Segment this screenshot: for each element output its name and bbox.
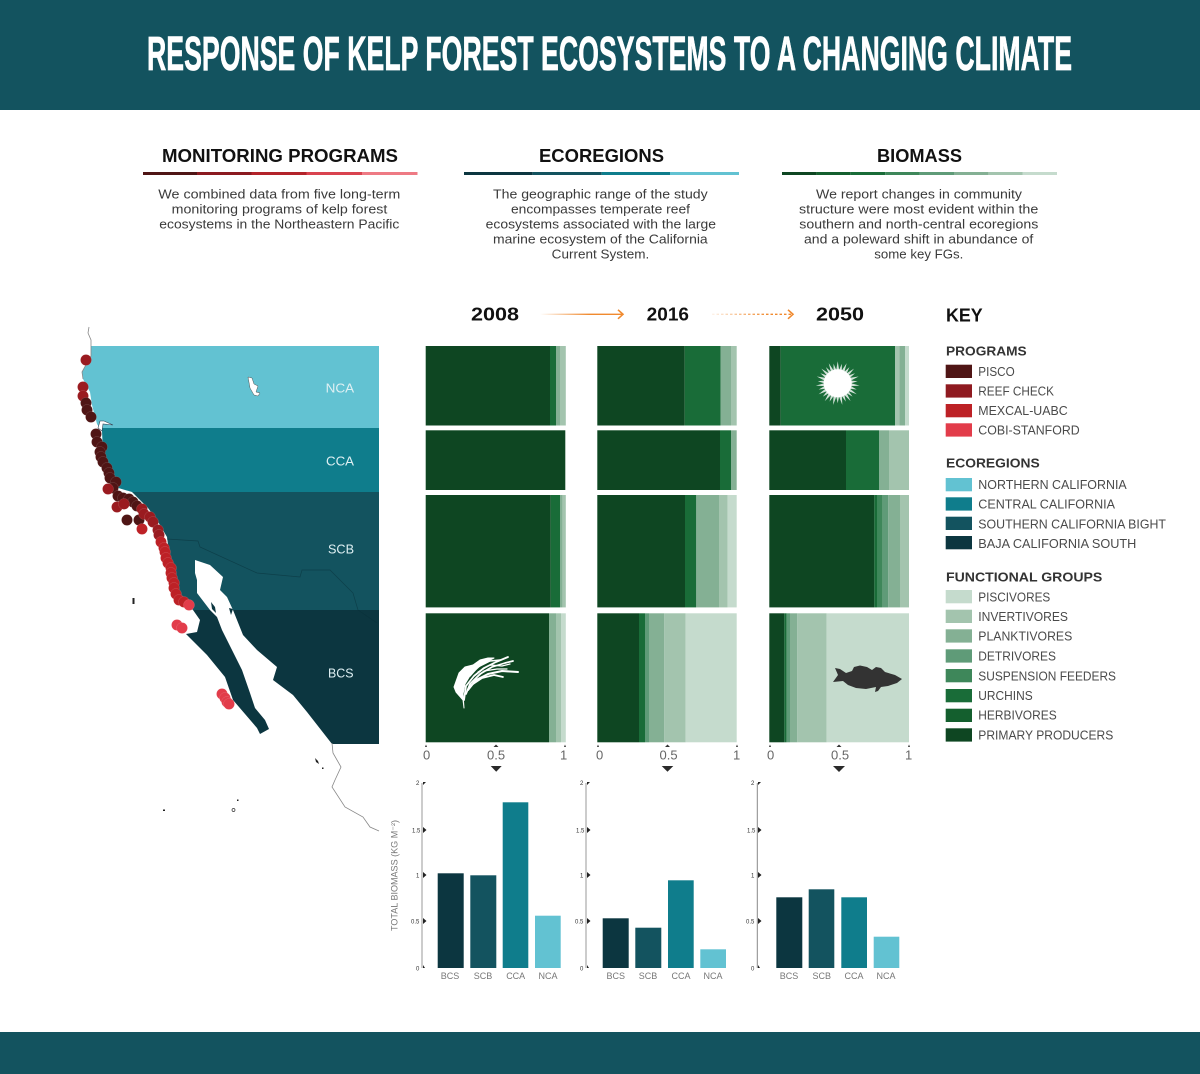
- coastline north: [82, 327, 91, 379]
- y axis: 1: [416, 874, 420, 880]
- legend: ecoregions: BAJA CALIFORNIA SOUTH: [978, 537, 1136, 551]
- bar SCB: [470, 875, 496, 968]
- text block: biomass description: and a poleward shift in abundance of: [804, 232, 1034, 246]
- legend: functional groups: HERBIVORES: [978, 709, 1057, 723]
- bar chart: biomass 2050: [746, 781, 899, 981]
- legend: programs: MEXCAL-UABC: [978, 404, 1068, 418]
- row BCS 2050: [769, 613, 909, 742]
- footer band: [0, 1032, 1200, 1074]
- text block: programs description: We combined data from five long-term: [158, 186, 400, 202]
- panel: biomass intro: [782, 146, 1057, 262]
- text block: ecoregions description: The geographic range of the study: [493, 186, 708, 202]
- legend: functional groups: URCHINS: [978, 689, 1033, 703]
- row SCB 2008: [426, 495, 566, 607]
- bar chart: biomass 2016: [575, 781, 726, 981]
- bar labels: CCA: [506, 971, 525, 981]
- map band: NCA: [60, 346, 379, 428]
- axis: stacked 2050: 1: [905, 747, 912, 762]
- text block: ecoregions description: marine ecosystem of the California: [493, 232, 709, 246]
- text block: ecoregions description: Current System.: [552, 246, 649, 262]
- y axis: [575, 781, 590, 972]
- year heading 2016: 2016: [647, 303, 689, 324]
- map label: BCS: BCS: [328, 666, 354, 681]
- legend: ecoregions: NORTHERN CALIFORNIA: [978, 478, 1127, 492]
- y axis: [746, 781, 762, 972]
- colour rule: programs: [143, 172, 418, 175]
- map band: SCB: [132, 492, 379, 610]
- y axis: 1.5: [412, 828, 421, 834]
- row SCB 2016: [597, 495, 737, 607]
- bar labels: NCA: [876, 971, 896, 981]
- bar labels: [780, 971, 896, 981]
- panel: key: [946, 306, 1166, 742]
- bar labels: SCB: [474, 971, 492, 981]
- legend: functional groups: FUNCTIONAL GROUPS: [946, 570, 1103, 585]
- row BCS 2016: [597, 613, 737, 742]
- bar NCA: [700, 949, 726, 968]
- y axis title: TOTAL BIOMASS (KG M⁻²): [390, 820, 400, 931]
- key heading: KEY: [946, 306, 983, 326]
- colour rule: ecoregions: [464, 172, 739, 175]
- axis: stacked 2050: 0: [767, 747, 774, 762]
- axis: stacked 2008: [423, 744, 567, 772]
- legend: ecoregions: [946, 456, 1166, 551]
- text block: ecoregions description: [486, 186, 716, 262]
- marker triangle: [491, 766, 502, 772]
- map label: CCA: CCA: [326, 454, 354, 469]
- text block: biomass description: some key FGs.: [874, 246, 963, 262]
- y axis: 2: [580, 781, 584, 787]
- text block: programs description: monitoring programs of kelp forest: [172, 202, 388, 216]
- y axis: 0.5: [746, 920, 755, 926]
- panel: ecoregions intro: [464, 146, 739, 262]
- legend: functional groups: SUSPENSION FEEDERS: [978, 669, 1116, 683]
- heading: ecoregions: ECOREGIONS: [539, 146, 664, 166]
- row SCB 2050: [769, 495, 909, 607]
- legend: programs: REEF CHECK: [978, 384, 1055, 398]
- row NCA 2016: [597, 346, 737, 426]
- y axis: 2: [751, 781, 755, 787]
- axis: stacked 2016: 1: [733, 747, 740, 762]
- year heading 2050: 2050: [816, 303, 864, 324]
- legend: functional groups: PLANKTIVORES: [978, 630, 1072, 644]
- map borders: [167, 539, 377, 623]
- legend: functional groups: PRIMARY PRODUCERS: [978, 728, 1113, 742]
- bar labels: NCA: [703, 971, 723, 981]
- axis: stacked 2008: 0: [423, 747, 430, 762]
- row CCA 2050: [769, 430, 909, 490]
- bar labels: NCA: [538, 971, 558, 981]
- bar labels: CCA: [671, 971, 691, 981]
- text block: biomass description: southern and north-central ecoregions: [799, 216, 1039, 232]
- y axis: 1: [751, 874, 755, 880]
- bar labels: SCB: [812, 971, 831, 981]
- axis: stacked 2008: 0.5: [487, 747, 505, 762]
- y axis: 1: [580, 874, 584, 880]
- bar NCA: [535, 916, 561, 968]
- legend: programs: COBI-STANFORD: [978, 424, 1080, 438]
- colour rule: biomass: [782, 172, 1057, 175]
- text block: ecoregions description: encompasses temperate reef: [511, 202, 690, 216]
- y axis: 2: [416, 781, 420, 787]
- row CCA 2016: [597, 430, 737, 490]
- bar labels: SCB: [639, 971, 657, 981]
- axis: stacked 2050: 0.5: [831, 747, 849, 762]
- bar labels: BCS: [606, 971, 625, 981]
- heading: biomass: BIOMASS: [877, 146, 962, 166]
- bar NCA: [874, 937, 899, 968]
- legend: ecoregions: CENTRAL CALIFORNIA: [978, 498, 1116, 512]
- map label: NCA: NCA: [326, 381, 355, 396]
- bar CCA: [841, 897, 867, 968]
- axis: stacked 2016: [596, 744, 740, 772]
- marker triangle: [833, 766, 845, 772]
- axis: stacked 2016: 0.5: [660, 747, 678, 762]
- row NCA 2008: [426, 346, 566, 426]
- bar labels: BCS: [780, 971, 798, 981]
- legend: functional groups: INVERTIVORES: [978, 610, 1068, 624]
- y axis: 0: [580, 966, 584, 972]
- bar chart: biomass 2008: [411, 781, 561, 981]
- y axis: 0: [416, 966, 420, 972]
- legend: functional groups: [946, 570, 1116, 742]
- text block: biomass description: [799, 186, 1039, 262]
- coastline south: [332, 743, 379, 831]
- y axis: 1.5: [747, 828, 756, 834]
- bar labels: [441, 971, 558, 981]
- icon: sun urchin: [816, 361, 860, 405]
- legend: ecoregions: ECOREGIONS: [946, 456, 1040, 471]
- bar CCA: [503, 802, 528, 968]
- marker triangle: [662, 766, 673, 772]
- icon: fish: [833, 666, 902, 692]
- arrow: 2016 to 2050: [712, 310, 793, 319]
- heading: monitoring programs: MONITORING PROGRAMS: [162, 146, 398, 166]
- text block: biomass description: structure were most evident within the: [799, 202, 1038, 216]
- bar SCB: [635, 928, 661, 968]
- row BCS 2008: [426, 613, 566, 742]
- bar labels: CCA: [844, 971, 864, 981]
- arrow: 2008 to 2016: [540, 310, 623, 319]
- legend: functional groups: DETRIVORES: [978, 650, 1056, 664]
- legend: ecoregions: SOUTHERN CALIFORNIA BIGHT: [978, 517, 1166, 531]
- small islands: [132, 598, 324, 812]
- axis: stacked 2008: 1: [560, 747, 567, 762]
- row NCA 2050: [769, 346, 909, 426]
- bar CCA: [668, 880, 694, 968]
- chart: stacked composition 2050: [769, 346, 909, 742]
- year heading 2008: 2008: [471, 303, 519, 324]
- y axis: 0: [751, 966, 755, 972]
- bar BCS: [438, 873, 464, 968]
- icon: kelp: [454, 657, 518, 708]
- text block: programs description: ecosystems in the Northeastern Pacific: [159, 216, 400, 232]
- y axis: 0.5: [411, 920, 420, 926]
- axis: stacked 2016: 0: [596, 747, 603, 762]
- bar BCS: [603, 918, 629, 968]
- y axis: 1.5: [576, 828, 585, 834]
- map band: BCS: [186, 610, 379, 744]
- map label: SCB: SCB: [328, 541, 354, 556]
- legend: functional groups: PISCIVORES: [978, 590, 1050, 604]
- legend: programs: PISCO: [978, 365, 1015, 379]
- island in NCA: [248, 377, 260, 396]
- legend: programs: [946, 344, 1080, 438]
- row CCA 2008: [426, 430, 565, 490]
- chart: stacked composition 2008: [426, 346, 566, 742]
- bar SCB: [809, 889, 834, 968]
- bar BCS: [776, 897, 802, 968]
- legend: programs: PROGRAMS: [946, 344, 1027, 359]
- text block: ecoregions description: ecosystems associated with the large: [486, 216, 716, 232]
- y axis: 0.5: [575, 920, 584, 926]
- header band: [0, 0, 1200, 110]
- axis: stacked 2050: [767, 744, 912, 772]
- panel: map of ecoregions: [60, 327, 379, 831]
- strait inlet: [98, 421, 113, 431]
- panel: monitoring programs intro: [143, 146, 418, 232]
- bar labels: [606, 971, 723, 981]
- chart: stacked composition 2016: [597, 346, 737, 742]
- text block: biomass description: We report changes in community: [816, 186, 1023, 202]
- monitoring site dots: [78, 354, 234, 710]
- bar labels: BCS: [441, 971, 459, 981]
- y axis: [411, 781, 426, 972]
- map band: CCA: [102, 428, 379, 492]
- text block: programs description: [158, 186, 400, 232]
